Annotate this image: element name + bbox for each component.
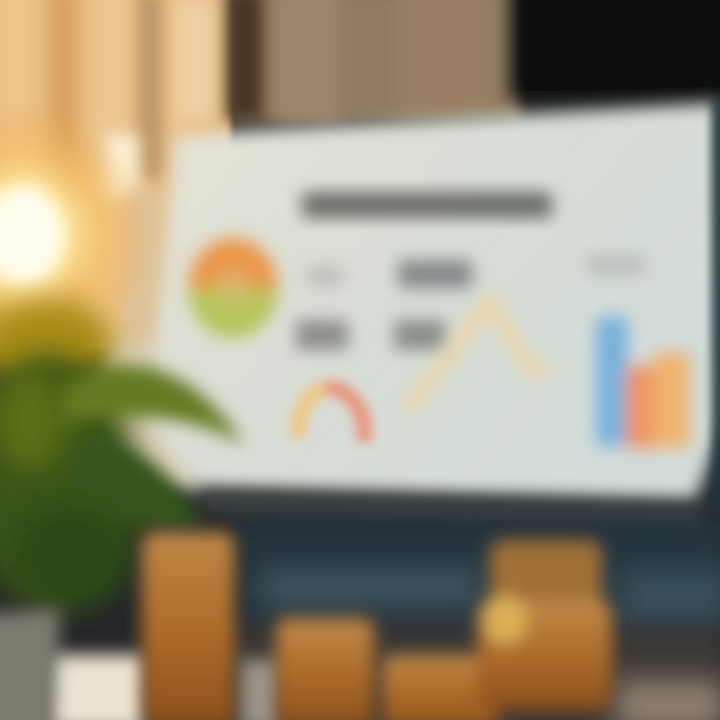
small stat labels [296, 254, 646, 350]
coin stack 3 [382, 655, 498, 720]
coin stack 4 [478, 540, 612, 710]
coin stack 1 [142, 532, 234, 720]
monitor stand and desk shadow [45, 520, 720, 720]
sun glare [0, 100, 150, 370]
monitor screen [150, 100, 720, 526]
gauge chart [298, 388, 365, 442]
coin stacks [142, 532, 612, 720]
donut chart [188, 238, 278, 338]
coin stack 2 [276, 618, 374, 720]
bar chart [596, 316, 690, 448]
line chart [408, 300, 550, 410]
plant pot [0, 608, 60, 720]
dashboard title bar [302, 192, 552, 218]
plant leaves [0, 300, 245, 605]
